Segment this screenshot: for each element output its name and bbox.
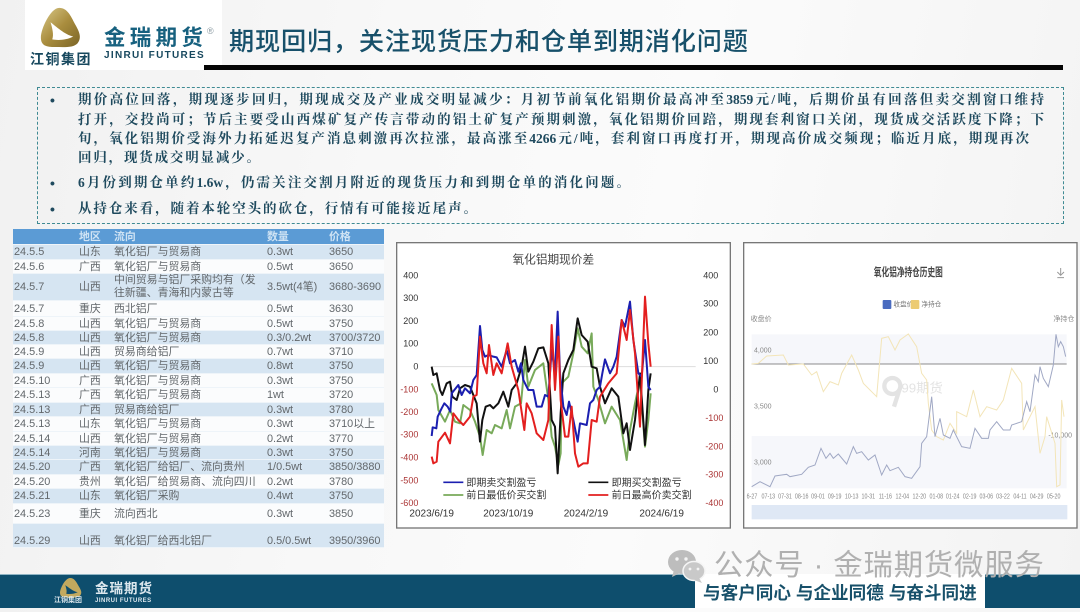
table: spot transactions: 3850 [329, 508, 353, 520]
text line 5: 6月份到期仓单约1.6w，仍需关注交割月附近的现货压力和到期仓单的消化问题。 [78, 175, 630, 190]
table: spot transactions: 西北铝厂 [114, 303, 158, 315]
icon: wechat watermark [668, 550, 705, 583]
x axis dates: 2023/10/19 [483, 509, 534, 520]
table: spot transactions: 1/0.5wt [267, 461, 302, 473]
left axis labels: 400 [403, 270, 418, 280]
table: spot transactions: 3750 [329, 375, 353, 387]
x axis dates: 09-01 [811, 493, 825, 501]
table: spot transactions: 山西 [79, 360, 101, 372]
table: spot transactions: 0.5wt [267, 261, 293, 273]
legend [443, 476, 692, 502]
table: spot transactions: 24.5.21 [14, 490, 50, 502]
series: prior-day highest sell delivery (red) [432, 297, 651, 467]
table: spot transactions: 氧化铝厂与贸易商 [114, 375, 201, 387]
table: spot transactions: 山西 [79, 332, 101, 344]
right axis labels: -300 [705, 470, 723, 480]
watermark text: 公众号 · 金瑞期货微服务 [714, 549, 1045, 582]
footer band [0, 574, 1080, 608]
icon: download [1057, 268, 1064, 278]
table: spot transactions: 3630 [329, 303, 353, 315]
bullet 3: • [50, 201, 55, 217]
x axis dates [747, 493, 1061, 501]
x axis dates: 01-08 [930, 493, 944, 501]
right axis labels: -200 [705, 441, 723, 451]
table: spot transactions: 3770 [329, 433, 353, 445]
table: spot transactions: 3710以上 [329, 418, 375, 430]
x axis dates: 01-24 [946, 493, 960, 501]
panel: basis line chart [396, 242, 731, 529]
bullet 1: • [50, 92, 55, 108]
plot bands [752, 334, 1067, 488]
table: spot transactions: 24.5.29 [14, 535, 50, 547]
axis labels: -10,000 [1048, 432, 1072, 439]
table: spot transactions: 山西 [79, 346, 101, 358]
table: spot transactions: 重庆 [79, 303, 101, 315]
x axis dates: 08-16 [795, 493, 809, 501]
table: spot transactions: 24.5.20 [14, 461, 50, 473]
brand latin name: JINRUI FUTURES [104, 50, 205, 61]
table: spot transactions: 24.5.8 [14, 332, 44, 344]
header logo block [25, 0, 222, 70]
x axis dates: 04-29 [1030, 493, 1044, 501]
table: spot transactions: 0.3wt [267, 375, 293, 387]
x axis dates: 10-13 [845, 493, 859, 501]
table: spot transactions: 24.5.13 [14, 418, 50, 430]
series: spot sell delivery P&L (blue) [432, 302, 651, 442]
table: spot transactions: 3780 [329, 476, 353, 488]
table: spot transactions: 重庆 [79, 508, 101, 520]
legend: 前日最低价买交割 [466, 489, 546, 502]
table: spot transactions: 3750 [329, 490, 353, 502]
table: spot transactions: 0.5wt [267, 303, 293, 315]
right axis labels: 400 [703, 270, 718, 280]
legend [883, 300, 942, 309]
table: spot transactions: 流向 [114, 231, 136, 243]
table: spot transactions: 氧化铝厂与贸易商 [114, 261, 201, 273]
table: spot transactions: 24.5.14 [14, 433, 50, 445]
table: spot transactions: 24.5.13 [14, 389, 50, 401]
table: spot transactions: 中间贸易与铝厂采购均有（发 [114, 274, 256, 286]
table: spot transactions: 24.5.7 [14, 303, 44, 315]
chart title: 氧化铝期现价差 [513, 253, 594, 267]
table: spot transactions: 3950/3960 [329, 535, 380, 547]
table: spot transactions: 24.5.14 [14, 447, 50, 459]
table: spot transactions: 氧化铝厂给西北铝厂 [114, 535, 212, 547]
x axis dates: 12-20 [913, 493, 927, 501]
series: closing price (blue gray) [752, 334, 1066, 487]
table: spot transactions: 氧化铝厂与贸易商 [114, 433, 201, 445]
table: spot transactions: 氧化铝厂与贸易商 [114, 447, 201, 459]
registered mark: ® [207, 26, 214, 36]
panel: key points text [37, 87, 1064, 224]
x axis dates: 2024/6/19 [639, 509, 684, 520]
x axis dates: 2023/6/19 [409, 509, 454, 520]
slogan panel: 与客户同心 与企业同德 与奋斗同进 [703, 583, 977, 603]
table: spot transactions: 氧化铝厂与贸易商 [114, 360, 201, 372]
table: spot transactions: 贵州 [79, 476, 101, 488]
footer latin name: JINRUI FUTURES [95, 598, 152, 604]
x axis dates: 11-16 [879, 493, 892, 501]
x axis dates: 09-19 [828, 493, 842, 501]
table: spot transactions: 3650 [329, 261, 353, 273]
table: spot transactions: 流向西北 [114, 508, 158, 520]
axis labels [751, 314, 1074, 467]
table: spot transactions [13, 229, 384, 548]
table: spot transactions: 价格 [329, 231, 351, 243]
table: spot transactions: 3720 [329, 389, 353, 401]
slogan panel [695, 574, 985, 608]
legend: 即期买交割盈亏 [612, 476, 682, 489]
legend: 即期卖交割盈亏 [466, 476, 536, 489]
table: spot transactions: 0.7wt [267, 346, 293, 358]
table: spot transactions: 广西 [79, 461, 101, 473]
axis labels: 4,000 [754, 348, 772, 355]
legend: 收盘价 [893, 300, 914, 309]
table: spot transactions: 3680-3690 [329, 281, 381, 293]
table: spot transactions: 山西 [79, 281, 101, 293]
brand name: 金瑞期货 [104, 26, 207, 50]
table: spot transactions: 广西 [79, 389, 101, 401]
table: spot transactions: 山东 [79, 246, 101, 258]
watermark: 99期货 [901, 380, 943, 396]
table: spot transactions: 0.2wt [267, 476, 293, 488]
header rule [204, 65, 1063, 70]
text line 4: 回归，现货成交明显减少。 [78, 150, 260, 165]
right axis labels: 300 [703, 299, 718, 309]
legend: 前日最高价卖交割 [612, 489, 692, 502]
left axis labels: -500 [400, 475, 418, 485]
left axis labels: 0 [413, 362, 418, 372]
panel: net position history chart [743, 242, 1078, 529]
footer group name: 江铜集团 [54, 597, 82, 604]
table: spot transactions: 0.3wt [267, 246, 293, 258]
x axis dates: 05-20 [1047, 493, 1061, 501]
table: spot transactions: 广西 [79, 375, 101, 387]
table: spot transactions: 贸易商给铝厂 [114, 404, 179, 416]
x axis dates: 07-31 [778, 493, 792, 501]
left axis labels: -100 [400, 384, 418, 394]
table: spot transactions: 3850/3880 [329, 461, 380, 473]
title: 期现回归，关注现货压力和仓单到期消化问题 [229, 28, 749, 56]
right axis labels: 100 [703, 356, 718, 366]
watermark [884, 378, 943, 407]
x axis dates: 03-06 [980, 493, 994, 501]
table: spot transactions: 3650 [329, 246, 353, 258]
table: spot transactions: 氧化铝厂与贸易商 [114, 246, 201, 258]
table: spot transactions: 24.5.9 [14, 346, 44, 358]
table: spot transactions: 氧化铝厂与贸易商 [114, 389, 201, 401]
table: spot transactions: 山东 [79, 418, 101, 430]
table: spot transactions: 3750 [329, 360, 353, 372]
x axis dates: 2024/2/19 [564, 509, 609, 520]
x axis dates: 03-22 [996, 493, 1010, 501]
table: spot transactions: 24.5.10 [14, 375, 50, 387]
table: spot transactions: 24.5.20 [14, 476, 50, 488]
right axis labels: 200 [703, 328, 718, 338]
table: spot transactions: 3750 [329, 318, 353, 330]
axis labels: 3,000 [754, 460, 772, 467]
table: spot transactions: 河南 [79, 447, 101, 459]
left axis labels: -300 [400, 430, 418, 440]
table: spot transactions: 氧化铝厂与贸易商 [114, 332, 201, 344]
table: spot transactions: 数量 [267, 231, 289, 243]
table: spot transactions: 山西 [79, 318, 101, 330]
axis labels: 收盘价 [751, 314, 772, 323]
table: spot transactions: 24.5.8 [14, 318, 44, 330]
left axis labels: 100 [403, 339, 418, 349]
table: spot transactions: 3780 [329, 404, 353, 416]
table: spot transactions: 24.5.7 [14, 281, 44, 293]
table: spot transactions: 0.5/0.5wt [267, 535, 311, 547]
table: spot transactions: 0.3wt [267, 447, 293, 459]
table: spot transactions: 氧化铝厂给铝厂、流向贵州 [114, 461, 245, 473]
right axis labels: 0 [713, 385, 718, 395]
axis labels: 净持仓 [1053, 314, 1074, 323]
left axis labels: -400 [400, 453, 418, 463]
group name: 江铜集团 [30, 51, 92, 67]
table: spot transactions: 往新疆、青海和内蒙古等 [114, 286, 234, 298]
left axis labels: -200 [400, 407, 418, 417]
text line 6: 从持仓来看，随着本轮空头的砍仓，行情有可能接近尾声。 [78, 201, 477, 216]
left axis labels [400, 270, 418, 508]
text line 1: 期价高位回落，期现逐步回归，期现成交及产业成交明显减少：月初节前氧化铝期价最高冲至3859元/吨，后期价虽有回落但卖交割窗口维持 [78, 92, 1044, 107]
x axis dates: 10-31 [862, 493, 876, 501]
table: spot transactions: 氧化铝厂给贸易商、流向四川 [114, 476, 256, 488]
range slider [752, 505, 1067, 519]
table: spot transactions: 山东 [79, 490, 101, 502]
chart title: 氧化铝净持仓历史图 [874, 266, 943, 279]
table: spot transactions: 0.3/0.2wt [267, 332, 311, 344]
table: spot transactions: 氧化铝厂采购 [114, 490, 179, 502]
table: spot transactions: 0.8wt [267, 360, 293, 372]
table: spot transactions: 山西 [79, 535, 101, 547]
footer brand name: 金瑞期货 [95, 581, 153, 596]
right axis labels: -100 [705, 413, 723, 423]
table: spot transactions: 0.3wt [267, 404, 293, 416]
table: spot transactions: 山西 [79, 433, 101, 445]
table: spot transactions: 0.3wt [267, 418, 293, 430]
left axis labels: 300 [403, 293, 418, 303]
table: spot transactions: 24.5.6 [14, 261, 44, 273]
table: spot transactions: 24.5.9 [14, 360, 44, 372]
left axis labels: 200 [403, 316, 418, 326]
table: spot transactions: 广西 [79, 261, 101, 273]
table: spot transactions: 0.5wt [267, 318, 293, 330]
table: spot transactions: 24.5.5 [14, 246, 44, 258]
table: spot transactions: 地区 [79, 231, 101, 243]
table: spot transactions: 贸易商给铝厂 [114, 346, 179, 358]
series: spot buy delivery P&L (black) [432, 318, 651, 473]
x axis dates: 04-11 [1013, 493, 1027, 501]
series: net position (yellow) [752, 334, 1064, 487]
right axis labels [703, 270, 723, 508]
table: spot transactions: 3.5wt(4笔) [267, 281, 317, 293]
x axis dates: 6-27 [747, 493, 758, 501]
table: spot transactions: 氧化铝厂与贸易商 [114, 318, 201, 330]
table: spot transactions: 0.4wt [267, 490, 293, 502]
legend: 净持仓 [921, 300, 942, 309]
table: spot transactions: 0.3wt [267, 508, 293, 520]
dashed border [37, 87, 1064, 224]
x axis dates: 07-13 [762, 493, 776, 501]
axis labels: 3,500 [754, 404, 772, 411]
table: spot transactions: 3750 [329, 447, 353, 459]
table: spot transactions: 24.5.23 [14, 508, 50, 520]
table: spot transactions: 广西 [79, 404, 101, 416]
right axis labels: -400 [705, 498, 723, 508]
x axis dates: 02-19 [963, 493, 977, 501]
icon: gold triangular logo [40, 8, 80, 48]
text line 3: 旬，氧化铝期价受海外力拓延迟复产消息刺激再次拉涨，最高涨至4266元/吨，套利窗口再度打开，期现高价成交频现；临近月底，期现再次 [78, 131, 1029, 146]
icon: footer logo [60, 578, 82, 598]
table: spot transactions: 0.2wt [267, 433, 293, 445]
bullet 2: • [50, 175, 55, 191]
table: spot transactions: 3710 [329, 346, 353, 358]
left axis labels: -600 [400, 498, 418, 508]
table: spot transactions: 24.5.13 [14, 404, 50, 416]
series: prior-day lowest buy delivery (green) [432, 328, 651, 465]
text line 2: 打开，交投尚可；节后主要受山西煤矿复产传言带动的铝土矿复产预期刺激，氧化铝期价回踣，期现套利窗口关闭，现货成交活跃度下降；下 [78, 112, 1044, 127]
x axis dates [409, 509, 684, 520]
table: spot transactions: 氧化铝厂与贸易商 [114, 418, 201, 430]
table: spot transactions: 1wt [267, 389, 284, 401]
table: spot transactions: 3700/3720 [329, 332, 380, 344]
x axis dates: 12-04 [896, 493, 910, 501]
